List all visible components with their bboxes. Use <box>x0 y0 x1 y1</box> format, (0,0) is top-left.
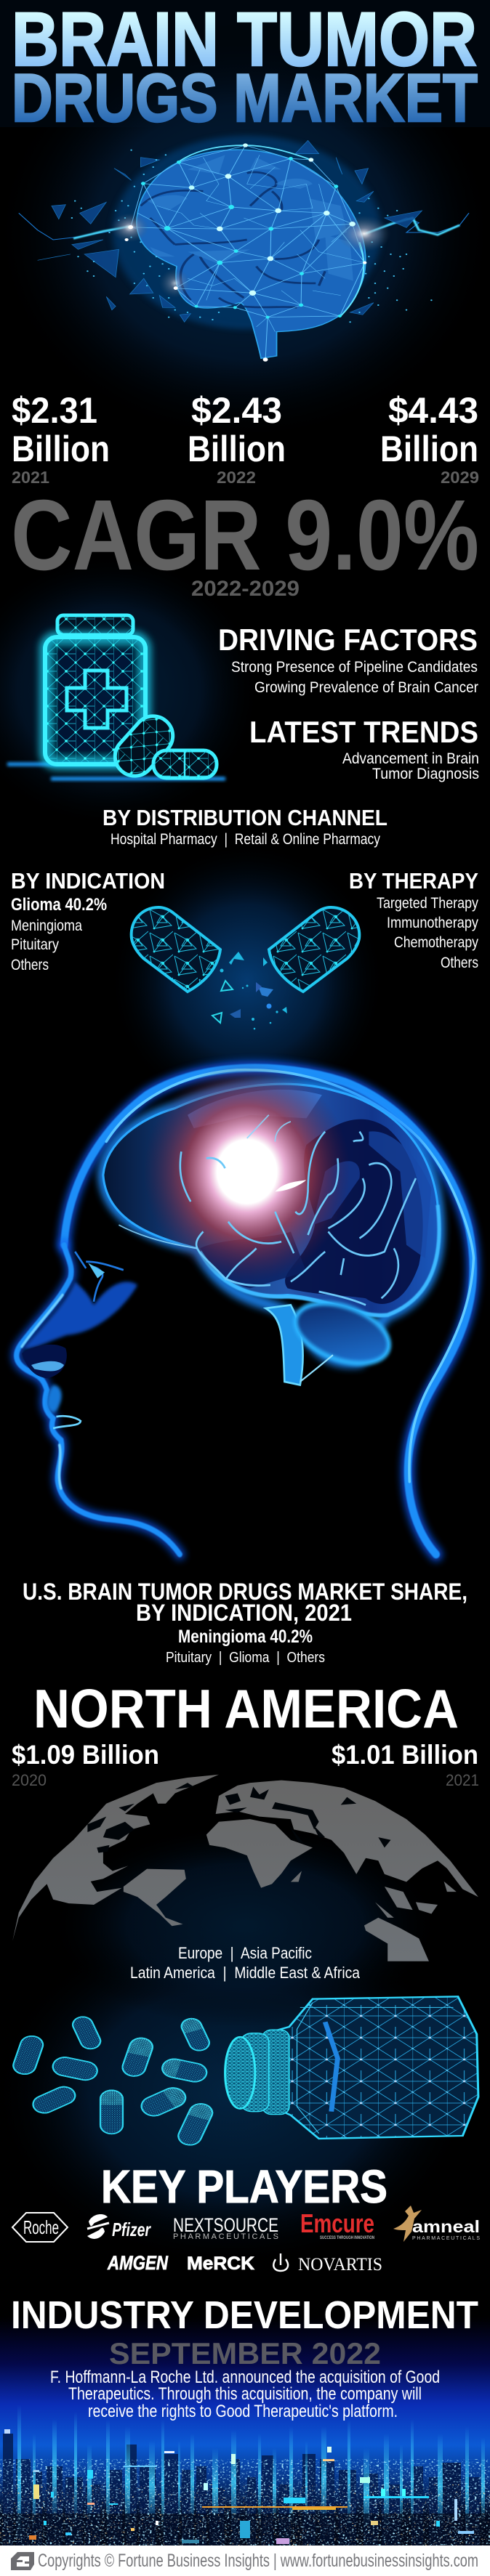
skyline buildings <box>3 2434 480 2545</box>
text: by distribution channel: BY DISTRIBUTION CHANNEL <box>103 805 387 830</box>
Africa land <box>206 1819 313 1888</box>
CAGR headline: 2022-2029 <box>191 577 300 601</box>
stat: 2021 region <box>332 1740 479 1789</box>
South America land <box>124 1869 186 1926</box>
text: by therapy: Others <box>441 955 478 971</box>
stat: 2021 region: 2021 <box>446 1771 479 1789</box>
text: latest trends: Tumor Diagnosis <box>372 766 479 782</box>
text: latest trends: Advancement in Brain <box>342 750 479 767</box>
heading: key players: KEY PLAYERS <box>101 2160 387 2213</box>
city lights <box>4 2429 474 2544</box>
logo: Pfizer: Pfizer <box>112 2219 151 2240</box>
stat: 2021 region: $1.01 Billion <box>332 1740 478 1770</box>
logo: Amneal: amneal <box>412 2217 480 2236</box>
particles <box>72 150 431 322</box>
text: development description: Therapeutics. Through this acquisition, the company will <box>68 2384 422 2404</box>
text: U.S. market share: Meningioma 40.2% <box>178 1627 313 1647</box>
stat: 2022: $2.43 <box>191 390 282 431</box>
stat: 2020 <box>12 1740 159 1789</box>
icon: medicine bottle and pills <box>7 615 225 784</box>
text: development description <box>50 2368 440 2421</box>
illustration: polygon brain <box>19 136 469 362</box>
text: by therapy <box>349 868 478 971</box>
brain mesh network <box>131 145 365 360</box>
stat: 2020: 2020 <box>12 1771 47 1789</box>
pills <box>11 2014 216 2147</box>
stat: 2021 <box>12 390 110 487</box>
title <box>12 0 478 136</box>
head outline <box>17 1068 473 1555</box>
illustration: spilled bottle and pills <box>11 1996 478 2147</box>
text: U.S. market share: BY INDICATION, 2021 <box>136 1600 352 1626</box>
logo: Emcure: Emcure <box>300 2208 374 2238</box>
bottle <box>225 1996 478 2139</box>
icon: Fortune Business Insights logo <box>11 2552 34 2570</box>
text: other regions <box>130 1944 361 1982</box>
text: by indication <box>11 868 165 973</box>
capsule fragments <box>212 952 287 1029</box>
logo: Nextsource <box>173 2214 278 2241</box>
logo: Amgen: AMGEN <box>107 2252 168 2274</box>
Australia land <box>364 1918 429 1961</box>
text: by indication: Meningioma <box>11 918 82 934</box>
heading: industry development <box>11 2293 478 2370</box>
text: development description: receive the rights to Good Therapeutic's platform. <box>88 2402 398 2421</box>
bottle <box>45 615 145 764</box>
stat: 2029 <box>380 390 479 487</box>
cerebellum and brain stem <box>266 1292 396 1385</box>
inland seas <box>87 1783 391 1853</box>
text: by indication: Glioma 40.2% <box>11 895 107 915</box>
icon: split capsule <box>132 907 359 1029</box>
logo: Roche <box>12 2213 68 2242</box>
text: by indication: Others <box>11 957 49 973</box>
logo: Merck: MeRCK <box>187 2253 254 2274</box>
logo: Novartis: NOVARTIS <box>298 2255 382 2275</box>
text: by indication: BY INDICATION <box>11 868 165 894</box>
text: by indication: Pituitary <box>11 936 59 953</box>
text: other regions: Latin America | Middle East & Africa <box>130 1964 361 1982</box>
text: by distribution channel: Hospital Pharmacy | Retail & Online Pharmacy <box>111 831 380 848</box>
logo: Pfizer <box>87 2214 151 2240</box>
stat: 2029: $4.43 <box>388 390 478 431</box>
footer <box>0 2545 490 2576</box>
text: by distribution channel <box>103 805 387 848</box>
stat: 2029: 2029 <box>441 468 479 487</box>
stat: 2022 <box>188 390 286 487</box>
world globe map <box>12 1775 478 1961</box>
brain nodes <box>125 143 366 362</box>
stat: 2029: Billion <box>380 429 478 469</box>
logo: Roche: Roche <box>23 2216 59 2238</box>
pills <box>107 708 217 784</box>
face shading <box>22 1252 137 1428</box>
text: by therapy: Immunotherapy <box>387 915 478 931</box>
stat: 2022: Billion <box>188 429 286 469</box>
text: U.S. market share: Pituitary | Glioma | Others <box>166 1650 325 1666</box>
face profile <box>17 1245 180 1555</box>
text: U.S. market share <box>23 1579 467 1666</box>
logo: Amneal: PHARMACEUTICALS <box>412 2236 480 2241</box>
North America land <box>12 1775 219 1941</box>
illustration: glowing head profile with brain <box>17 1061 473 1555</box>
logo: Amneal <box>393 2206 480 2242</box>
text: by therapy: BY THERAPY <box>349 868 478 894</box>
logo: Emcure: SUCCESS THROUGH INNOVATION <box>320 2236 374 2240</box>
stat: 2021: $2.31 <box>12 390 97 431</box>
logo: Novartis <box>273 2253 382 2275</box>
Eurasia land <box>216 1781 478 1897</box>
stat: 2021: 2021 <box>12 468 49 487</box>
light beams <box>17 2405 485 2543</box>
text: other regions: Europe | Asia Pacific <box>178 1944 312 1962</box>
text: driving factors <box>218 623 478 696</box>
heading: industry development: SEPTEMBER 2022 <box>109 2336 381 2370</box>
city window speckle <box>0 2459 490 2545</box>
logo: Nextsource: NEXTSOURCE <box>173 2214 278 2236</box>
illustration: blue city skyline <box>0 2317 490 2545</box>
stat: 2020: $1.09 Billion <box>12 1740 159 1770</box>
stat: 2021: Billion <box>12 429 110 469</box>
stat: 2022: 2022 <box>217 468 256 487</box>
text: latest trends <box>249 715 479 782</box>
logo: Nextsource: PHARMACEUTICALS <box>173 2232 278 2241</box>
heading: North America: NORTH AMERICA <box>33 1678 459 1739</box>
brain <box>103 1061 439 1362</box>
